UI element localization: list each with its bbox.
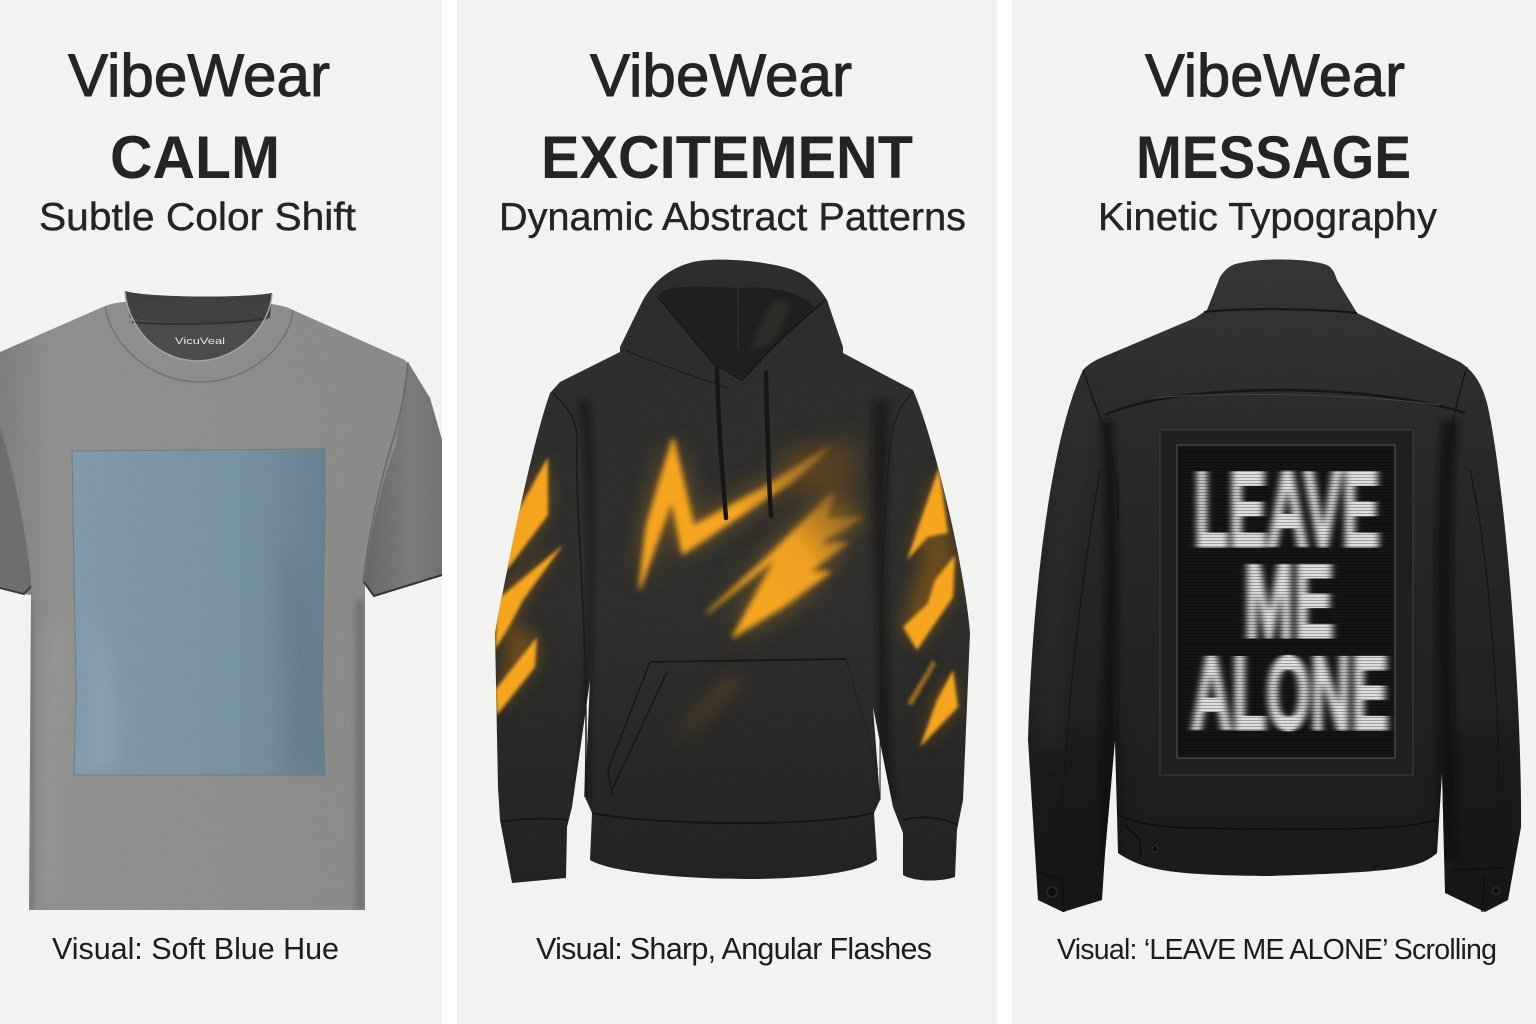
hood inside	[658, 287, 815, 378]
hood edge lines	[658, 297, 825, 380]
subtitle: subtle color shift: Subtle Color Shift	[39, 196, 356, 239]
caption: angular flashes: Visual: Sharp, Angular Flashes	[536, 932, 932, 966]
waistband and cuffs	[502, 813, 957, 825]
sleeve lines	[1060, 367, 1500, 860]
lightning bolt: chest lower	[707, 493, 863, 637]
neck inside	[125, 292, 272, 361]
subtitle: dynamic abstract patterns: Dynamic Abstract Patterns	[499, 196, 966, 239]
screen text: leave me alone: LEAVE	[1194, 449, 1380, 569]
fabric grain	[0, 290, 442, 910]
illustration: hoodie	[490, 258, 975, 886]
lightning bolts: right sleeve	[903, 467, 958, 747]
right sleeve	[364, 362, 442, 596]
lightning bolts: left sleeve	[495, 457, 563, 715]
lightning bolt: chest upper	[640, 440, 830, 587]
subtitle: kinetic typography: Kinetic Typography	[1098, 196, 1437, 239]
hem and cuff buttons	[1047, 846, 1500, 897]
jacket grain	[1160, 320, 1400, 420]
blue colour panel	[72, 449, 325, 775]
display panel	[1160, 430, 1413, 775]
clipped shading and glow	[497, 400, 958, 800]
panel: excitement	[457, 0, 997, 1024]
heading: brand message: VibeWear	[1145, 42, 1405, 109]
screen	[1177, 445, 1395, 758]
panel: message	[1012, 0, 1536, 1024]
hem band	[1118, 815, 1437, 857]
screen text: leave me alone: ME	[1244, 544, 1334, 660]
back yoke	[1105, 390, 1465, 415]
panel: calm	[0, 0, 442, 1024]
heading: message: MESSAGE	[1136, 124, 1411, 191]
clipped sleeve shading	[1028, 400, 1525, 915]
illustration: jacket	[1028, 259, 1525, 915]
heading: brand excitement: VibeWear	[590, 42, 852, 109]
drawstrings	[717, 367, 771, 518]
collar rib	[105, 307, 293, 382]
shoulder seams	[553, 393, 586, 797]
neck tag text: VicuVeal	[175, 336, 225, 347]
body soft folds	[29, 600, 365, 910]
heading: calm: CALM	[110, 124, 280, 191]
fleece grain	[490, 258, 975, 886]
heading: excitement: EXCITEMENT	[541, 124, 913, 191]
heading: brand calm: VibeWear	[68, 42, 330, 109]
caption: scrolling message: Visual: ‘LEAVE ME ALONE’ Scrolling	[1057, 934, 1497, 966]
screen text: leave me alone	[1191, 449, 1389, 752]
illustration: t-shirt	[0, 290, 442, 910]
collar seam	[1204, 309, 1357, 313]
caption: soft blue hue: Visual: Soft Blue Hue	[52, 932, 339, 966]
kangaroo pocket	[608, 659, 878, 795]
left sleeve	[0, 427, 31, 594]
